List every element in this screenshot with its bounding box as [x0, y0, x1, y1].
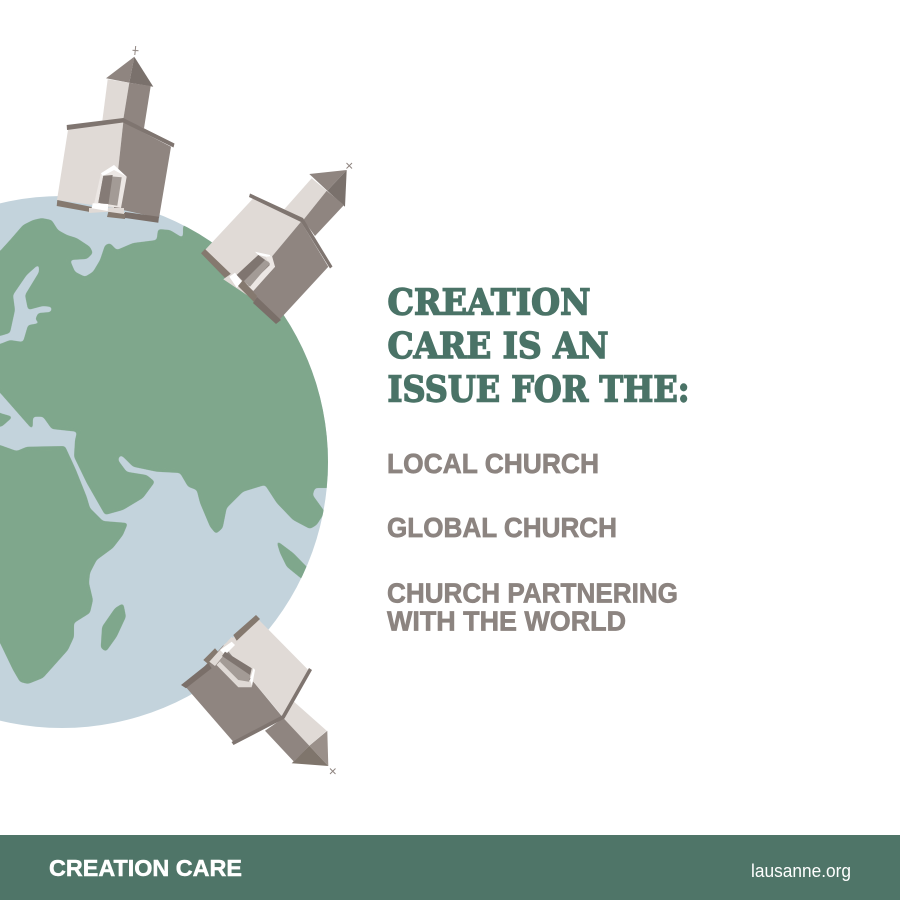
nave walls — [205, 198, 301, 290]
nave walls — [57, 122, 123, 208]
land: Africa — [0, 442, 128, 684]
cross — [346, 163, 352, 168]
globe — [0, 196, 340, 728]
tower — [283, 702, 327, 746]
item: church partnering with the world — [387, 578, 678, 636]
spire — [309, 170, 347, 191]
spire — [106, 57, 134, 83]
plinth — [57, 200, 92, 212]
church: upper right — [201, 163, 352, 324]
footer band — [0, 835, 900, 900]
eaves — [249, 194, 332, 268]
cross — [132, 46, 138, 55]
land: southern Europe sliver — [0, 412, 11, 427]
sea: Baltic — [0, 264, 52, 345]
nave walls — [223, 618, 308, 717]
plinth — [233, 615, 260, 641]
footer title: CREATION CARE — [49, 855, 242, 881]
land: Madagascar — [101, 603, 126, 652]
cross — [330, 768, 336, 774]
land: Sumatra — [278, 542, 306, 578]
ocean — [0, 196, 328, 728]
item: church partnering with the world: WITH THE WORLD — [387, 606, 626, 636]
steps — [223, 273, 255, 298]
doorway — [94, 165, 127, 208]
land: Eurasia — [0, 218, 340, 534]
plinth — [201, 249, 231, 278]
steps — [209, 637, 235, 666]
doorway — [250, 252, 275, 290]
eaves — [67, 118, 174, 148]
church: top — [57, 46, 175, 223]
heading: ISSUE FOR THE: — [388, 370, 690, 410]
continents — [0, 218, 340, 684]
steps — [89, 208, 124, 214]
list of church levels — [387, 448, 678, 636]
doorway — [216, 660, 255, 687]
item: local church: LOCAL CHURCH — [387, 448, 599, 479]
footer url: lausanne.org — [751, 861, 851, 881]
tower — [102, 79, 129, 121]
tower — [284, 178, 327, 220]
spire — [309, 731, 328, 766]
heading — [388, 282, 690, 410]
heading: CREATION — [388, 282, 590, 324]
eaves — [232, 668, 312, 745]
item: global church: GLOBAL CHURCH — [387, 512, 617, 543]
heading: CARE IS AN — [388, 326, 608, 367]
church: bottom — [181, 615, 336, 774]
item: church partnering with the world: CHURCH PARTNERING — [387, 578, 678, 608]
